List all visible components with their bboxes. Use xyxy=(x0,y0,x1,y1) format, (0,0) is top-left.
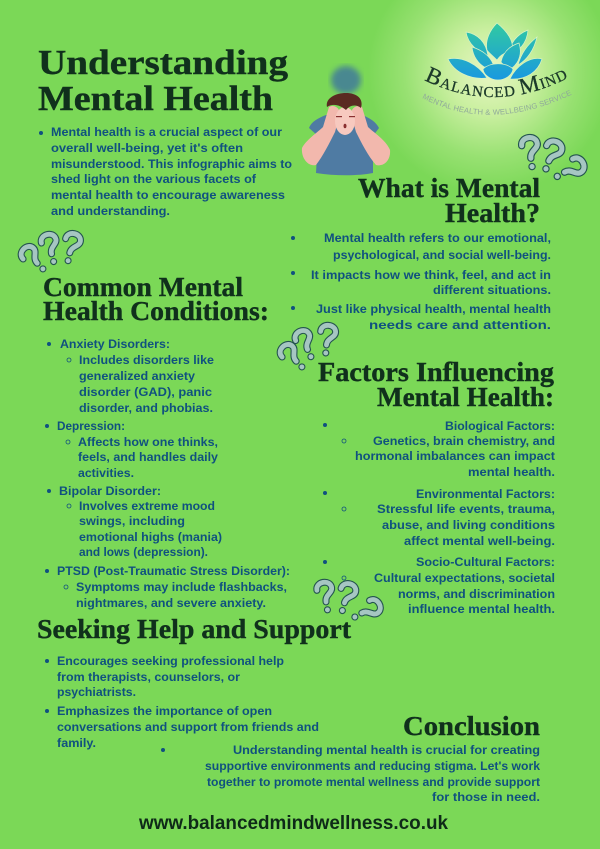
panel: what is mental health list: Mental health refers to our emotional, xyxy=(324,231,551,245)
illustration: stressed person xyxy=(302,66,390,175)
panel: seeking help list: family. xyxy=(57,736,96,750)
intro text: mental health to encourage awareness xyxy=(51,188,285,202)
website url: www.balancedmindwellness.co.uk xyxy=(138,813,448,834)
heading: common mental health conditions xyxy=(43,272,269,326)
icon: question marks lower xyxy=(316,581,383,625)
intro text xyxy=(39,125,292,218)
logo tagline: MENTAL HEALTH & WELLBEING SERVICE xyxy=(422,90,572,115)
panel: conditions list xyxy=(45,337,290,610)
depression xyxy=(45,419,218,480)
biological factors: mental health. xyxy=(468,465,555,479)
face xyxy=(335,107,355,135)
panel: what is mental health list: needs care and attention. xyxy=(369,318,551,332)
panel: conclusion text: together to promote mental wellness and provide support xyxy=(207,775,540,789)
bipolar disorder: swings, including xyxy=(79,514,185,528)
heading: factors influencing mental health: Factors Influencing xyxy=(318,357,555,387)
logo: Balanced Mind xyxy=(422,22,572,115)
logo wordmark: BALANCED MIND xyxy=(424,66,566,98)
panel: what is mental health list: It impacts how we think, feel, and act in xyxy=(311,268,551,282)
socio-cultural factors: norms, and discrimination xyxy=(398,587,555,601)
biological factors: Genetics, brain chemistry, and xyxy=(373,434,555,448)
intro text: and understanding. xyxy=(51,204,170,218)
panel: factors list xyxy=(323,419,555,616)
depression: feels, and handles daily xyxy=(78,450,218,464)
bipolar disorder: Bipolar Disorder: xyxy=(59,484,161,498)
socio-cultural factors xyxy=(323,555,555,616)
bipolar disorder xyxy=(47,484,222,559)
panel: what is mental health list xyxy=(291,231,551,332)
heading: what is mental health xyxy=(358,173,541,228)
panel: conclusion text xyxy=(161,743,540,804)
intro text: misunderstood. This infographic aims to xyxy=(51,157,292,171)
environmental factors: Stressful life events, trauma, xyxy=(377,502,555,516)
steam cloud xyxy=(331,66,361,94)
hair xyxy=(327,93,362,110)
anxiety disorders: generalized anxiety xyxy=(79,369,195,383)
panel: seeking help list: conversations and support from friends and xyxy=(57,720,319,734)
left arm xyxy=(302,106,340,165)
anxiety disorders: Anxiety Disorders: xyxy=(60,337,170,351)
right arm xyxy=(351,106,390,165)
mouth and eyes xyxy=(336,116,355,128)
biological factors xyxy=(323,419,555,479)
environmental factors: abuse, and living conditions xyxy=(382,518,555,532)
environmental factors: Environmental Factors: xyxy=(416,487,555,501)
depression: Affects how one thinks, xyxy=(78,435,218,449)
intro text: Mental health is a crucial aspect of our xyxy=(51,125,282,139)
title: Mental Health xyxy=(38,79,273,118)
panel: seeking help list: from therapists, counselors, or xyxy=(57,670,240,684)
panel: what is mental health list: Just like physical health, mental health xyxy=(316,302,551,316)
heading: conclusion: Conclusion xyxy=(403,711,540,741)
panel: seeking help list: Encourages seeking professional help xyxy=(57,654,284,668)
biological factors: Biological Factors: xyxy=(445,419,555,433)
bipolar disorder: and lows (depression). xyxy=(79,545,208,559)
heading: common mental health conditions: Health Conditions: xyxy=(43,296,269,326)
panel: seeking help list: psychiatrists. xyxy=(57,685,136,699)
icon: lotus xyxy=(448,23,542,80)
icon: question marks middle xyxy=(277,325,336,374)
title xyxy=(38,43,289,118)
ptsd: Symptoms may include flashbacks, xyxy=(76,580,287,594)
title: Understanding xyxy=(38,43,289,82)
anxiety disorders: disorder, and phobias. xyxy=(79,401,213,415)
panel: seeking help list xyxy=(45,654,319,750)
socio-cultural factors: influence mental health. xyxy=(408,602,555,616)
panel: conclusion text: for those in need. xyxy=(432,790,540,804)
panel: what is mental health list: psychological, and social well-being. xyxy=(333,248,551,262)
heading: seeking help and support: Seeking Help and Support xyxy=(37,614,351,644)
icon: question marks top right xyxy=(521,137,587,185)
panel: conclusion text: supportive environments and reducing stigma. Let's work xyxy=(205,759,540,773)
socio-cultural factors: Socio-Cultural Factors: xyxy=(416,555,555,569)
ptsd: PTSD (Post-Traumatic Stress Disorder): xyxy=(57,564,290,578)
heading: factors influencing mental health: Mental Health: xyxy=(377,382,554,412)
socio-cultural factors: Cultural expectations, societal xyxy=(374,571,555,585)
environmental factors xyxy=(323,487,555,548)
panel: seeking help list: Emphasizes the importance of open xyxy=(57,704,272,718)
shirt xyxy=(309,115,379,175)
panel: conclusion text: Understanding mental health is crucial for creating xyxy=(233,743,540,757)
anxiety disorders: Includes disorders like xyxy=(79,353,214,367)
ptsd xyxy=(45,564,290,610)
intro text: shed light on the various facets of xyxy=(51,172,257,186)
heading: what is mental health: Health? xyxy=(445,198,540,228)
bipolar disorder: Involves extreme mood xyxy=(79,499,215,513)
depression: activities. xyxy=(78,466,134,480)
environmental factors: affect mental well-being. xyxy=(404,534,555,548)
depression: Depression: xyxy=(57,419,125,433)
intro text: overall well-being, yet it's often xyxy=(51,141,243,155)
logo glow xyxy=(368,0,600,194)
heading: common mental health conditions: Common Mental xyxy=(43,272,243,302)
bipolar disorder: emotional highs (mania) xyxy=(79,530,222,544)
biological factors: hormonal imbalances can impact xyxy=(355,449,555,463)
panel: what is mental health list: different situations. xyxy=(433,283,551,297)
anxiety disorders: disorder (GAD), panic xyxy=(79,385,212,399)
ptsd: nightmares, and severe anxiety. xyxy=(76,596,266,610)
icon: question marks left xyxy=(18,232,82,276)
heading: factors influencing mental health xyxy=(318,357,555,412)
heading: what is mental health: What is Mental xyxy=(358,173,541,203)
anxiety disorders xyxy=(47,337,214,415)
